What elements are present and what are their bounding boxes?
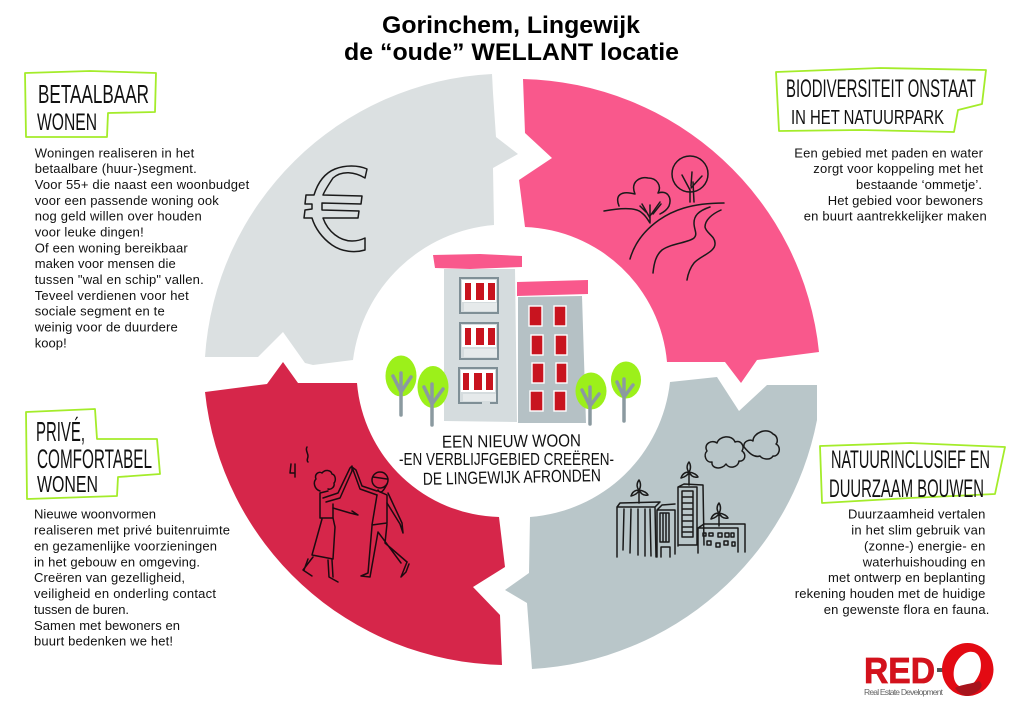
text block: natuurinclusief en duurzaam bouwen: (zonne-) energie- en	[864, 538, 985, 553]
panel: prive comfortabel segment	[205, 362, 505, 665]
text block: betaalbaar wonen: sociale segment en te	[35, 304, 165, 319]
text block: biodiversiteit: bestaande ‘ommetje’.	[856, 177, 982, 192]
text block: betaalbaar wonen: voor leuke dingen!	[35, 224, 144, 240]
text block: prive comfortabel wonen: Creëren van gezelligheid,	[34, 570, 185, 585]
title: Gorinchem, Lingewijk	[382, 12, 640, 39]
text block: biodiversiteit: Het gebied voor bewoners	[828, 193, 984, 208]
text block: natuurinclusief en duurzaam bouwen: met ontwerp en beplanting	[828, 570, 985, 585]
text block: natuurinclusief en duurzaam bouwen: en gewenste flora en fauna.	[824, 602, 989, 617]
text block: betaalbaar wonen: Teveel verdienen voor het	[35, 288, 189, 303]
text block: prive comfortabel wonen: Samen met bewoners en	[34, 618, 180, 633]
text block: prive comfortabel wonen	[34, 507, 230, 649]
title: de “oude” WELLANT locatie	[344, 39, 679, 66]
logo: RED-O Real Estate Development: Real Estate Development	[864, 687, 944, 697]
text block: biodiversiteit: zorgt voor koppeling met het	[813, 161, 983, 176]
text block: betaalbaar wonen: koop!	[35, 335, 67, 350]
text block: central caption: EEN NIEUW WOON	[442, 430, 581, 452]
icon: euro	[304, 166, 367, 252]
text block: prive comfortabel wonen: buurt bedenken we het!	[34, 634, 173, 649]
text block: central caption: DE LINGEWIJK AFRONDEN	[423, 465, 601, 489]
heading: biodiversiteit: IN HET NATUURPARK	[791, 107, 944, 129]
text block: biodiversiteit	[794, 145, 987, 224]
title	[344, 12, 679, 66]
building: right tower	[517, 280, 588, 423]
text block: natuurinclusief en duurzaam bouwen: rekening houden met de huidige	[795, 586, 985, 601]
text block: betaalbaar wonen: betaalbare (huur-)segment.	[35, 161, 197, 176]
text block: natuurinclusief en duurzaam bouwen	[795, 507, 989, 617]
text block: central caption	[399, 430, 614, 489]
text block: betaalbaar wonen	[34, 145, 250, 350]
text block: betaalbaar wonen: nog geld willen over houden	[35, 209, 202, 224]
icon: two people high five	[290, 447, 409, 582]
text block: betaalbaar wonen: weinig voor de duurdere	[34, 320, 178, 334]
text block: prive comfortabel wonen: in het gebouw en omgeving.	[34, 554, 200, 569]
heading: prive comfortabel wonen: WONEN	[37, 471, 98, 497]
text block: betaalbaar wonen: maken voor mensen die	[35, 256, 176, 271]
panel: biodiversiteit segment	[519, 79, 819, 383]
heading: natuurinclusief en duurzaam bouwen	[820, 443, 1005, 503]
heading: betaalbaar wonen: BETAALBAAR	[38, 79, 149, 109]
text block: betaalbaar wonen: Voor 55+ die naast een woonbudget	[35, 177, 250, 192]
text block: prive comfortabel wonen: en gezamenlijke voorzieningen	[34, 538, 217, 553]
building: left tower	[433, 254, 522, 422]
panel: betaalbaar wonen segment	[205, 74, 518, 365]
panel: natuurinclusief segment	[505, 377, 817, 669]
icon: hills, trees and paths	[604, 156, 724, 280]
text block: betaalbaar wonen: voor een passende woning ook	[35, 193, 219, 208]
text block: prive comfortabel wonen: veiligheid en onderling contact	[34, 586, 216, 601]
heading: prive comfortabel wonen: PRIVÉ,	[36, 416, 85, 447]
text block: natuurinclusief en duurzaam bouwen: in het slim gebruik van	[851, 523, 985, 538]
text block: natuurinclusief en duurzaam bouwen: waterhuishouding en	[862, 554, 985, 569]
text block: betaalbaar wonen: tussen "wal en schip" vallen.	[35, 272, 204, 287]
heading: betaalbaar wonen: WONEN	[37, 109, 97, 136]
heading: prive comfortabel wonen	[26, 409, 160, 499]
heading: biodiversiteit	[776, 68, 986, 132]
text block: central caption: -EN VERBLIJFGEBIED CREËREN-	[399, 449, 614, 469]
text block: biodiversiteit: en buurt aantrekkelijker maken	[804, 209, 987, 224]
icon: city with wind turbines	[617, 431, 779, 557]
trees	[386, 356, 641, 425]
text block: betaalbaar wonen: Woningen realiseren in het	[35, 145, 195, 160]
logo: RED-O Real Estate Development	[864, 643, 994, 697]
text block: betaalbaar wonen: Of een woning bereikbaar	[35, 240, 188, 255]
text block: natuurinclusief en duurzaam bouwen: Duurzaamheid vertalen	[848, 507, 985, 522]
text block: biodiversiteit: Een gebied met paden en water	[794, 145, 984, 160]
logo: RED-O Real Estate Development: RED	[864, 650, 935, 691]
text block: prive comfortabel wonen: tussen de buren.	[34, 602, 129, 617]
illustration: central buildings and trees	[386, 254, 641, 425]
text block: prive comfortabel wonen: realiseren met privé buitenruimte	[34, 523, 230, 538]
heading: betaalbaar wonen	[25, 71, 156, 137]
text block: prive comfortabel wonen: Nieuwe woonvormen	[34, 507, 156, 522]
heading: prive comfortabel wonen: COMFORTABEL	[37, 444, 152, 474]
